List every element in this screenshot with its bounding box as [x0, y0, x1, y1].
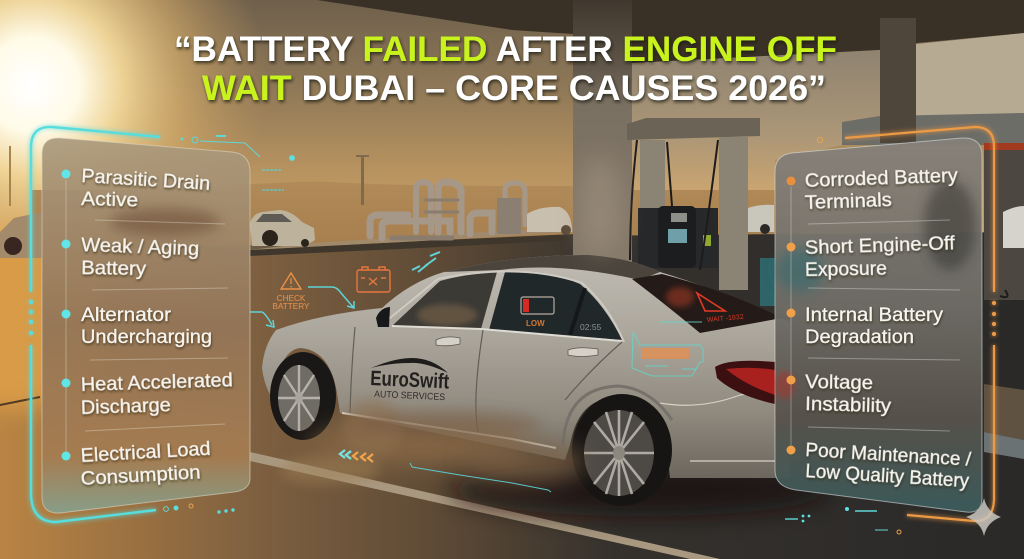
rear wheel arch: [563, 386, 672, 445]
window chrome upper: [385, 271, 624, 342]
white car right: [1003, 206, 1024, 248]
spokes rear: [584, 410, 654, 496]
tail light glow through card: [775, 371, 795, 399]
rear door handle: [568, 348, 598, 356]
roof dark: [444, 255, 660, 280]
icon: battery warning: [357, 267, 390, 292]
front door handle: [436, 337, 460, 346]
dividers left: [85, 220, 228, 431]
dark blur in left card: [110, 208, 220, 236]
item: poor maintenance low quality battery: Low Quality Battery: [805, 460, 970, 492]
canopy underside: [317, 0, 1024, 70]
left glass card: [42, 138, 250, 513]
pump canopy: [627, 118, 760, 140]
low battery icon in window: [521, 297, 554, 328]
sun glow: [0, 0, 330, 330]
car shadow: [450, 464, 830, 516]
item: voltage instability: Voltage: [805, 371, 873, 394]
item: heat accelerated discharge: Heat Accelerated: [80, 369, 233, 396]
arrow: to hood: [250, 312, 274, 327]
road marking line: [250, 452, 720, 559]
red reflection rear glass: [666, 287, 694, 307]
dark blur in right card: [924, 180, 976, 270]
icon: check battery warning: BATTERY: [272, 302, 310, 311]
item: internal battery degradation: Internal Battery: [805, 304, 943, 326]
rim front: [278, 365, 320, 431]
building right lower: [984, 150, 1024, 300]
item: short engine-off exposure: Exposure: [805, 258, 887, 281]
parked car distant centre: [250, 210, 315, 247]
item: weak aging battery: [62, 234, 200, 280]
item: parasitic drain: [62, 165, 211, 211]
check battery label: CHECK: [277, 294, 306, 303]
front door window: [392, 272, 497, 329]
item: internal battery degradation: [786, 304, 943, 348]
light pole: [356, 155, 369, 205]
window chrome: [392, 326, 622, 341]
kerb: [250, 234, 575, 256]
fuel pump: [638, 206, 718, 268]
item: parasitic drain: Active: [81, 188, 138, 211]
pump pillars: [640, 137, 748, 290]
hoses: [630, 140, 1008, 297]
item: weak aging battery: Weak / Aging: [81, 234, 200, 260]
tail light: [715, 361, 775, 404]
rear wall pale sky: [916, 33, 1024, 118]
item: electrical load consumption: Electrical Load: [80, 438, 211, 467]
title line 2: WAIT DUBAI – CORE CAUSES 2026”: [202, 69, 826, 108]
neon frame right: [845, 127, 995, 521]
car body: [262, 255, 790, 478]
road circuit line: [410, 463, 551, 492]
item: corroded battery terminals: Corroded Battery: [804, 165, 958, 192]
neon frame left: [30, 127, 160, 522]
tank equipment: [497, 198, 521, 234]
item: alternator undercharging: Undercharging: [81, 326, 212, 348]
dividers right: [808, 220, 960, 431]
side mirror: [376, 307, 390, 327]
tiled pavement: [984, 384, 1024, 440]
mid backdrop: [632, 50, 880, 190]
logo subtitle: AUTO SERVICES: [374, 389, 445, 403]
quarter pillar: [570, 288, 585, 335]
white car behind pillar: [527, 207, 572, 235]
panel: left causes: [30, 127, 294, 522]
ground crack: [0, 397, 40, 405]
time readout: 02:55: [580, 322, 602, 332]
road surface: [0, 232, 1024, 559]
timeline left: [65, 180, 67, 460]
sky: [0, 0, 1024, 240]
item: heat accelerated discharge: Discharge: [80, 394, 171, 419]
main pillar: [573, 0, 632, 262]
item: corroded battery terminals: [786, 165, 958, 214]
car: [262, 255, 830, 516]
pillar right: [880, 18, 916, 143]
item: weak aging battery: Battery: [81, 257, 147, 280]
warning triangle in rear glass: [697, 293, 725, 311]
HUD details left: [164, 136, 294, 513]
item: heat accelerated discharge: [62, 369, 233, 419]
building fascia right: [842, 113, 1024, 145]
item: alternator undercharging: Alternator: [81, 304, 172, 326]
logo wordmark: EuroSwift: [370, 367, 450, 393]
rear glass text: WAIT -1832: [707, 314, 744, 324]
right glass card: [775, 138, 982, 512]
item: alternator undercharging: [62, 304, 212, 348]
item: voltage instability: [786, 371, 892, 417]
tyre front: [270, 352, 336, 440]
item: poor maintenance low quality battery: Poor Maintenance /: [805, 439, 972, 471]
desert dunes: [30, 182, 800, 245]
red stripe building: [984, 143, 1024, 150]
holographic battery gauge: [632, 322, 703, 376]
far pole left: [9, 146, 11, 206]
kerb right: [984, 432, 1024, 459]
item: short engine-off exposure: Short Engine-Off: [804, 232, 956, 259]
timeline right: [790, 187, 792, 445]
item: electrical load consumption: Consumption: [80, 461, 201, 490]
arrow: to windscreen: [308, 287, 354, 308]
item: electrical load consumption: [62, 438, 211, 490]
door shut line: [350, 327, 622, 432]
logo: EuroSwift: [370, 358, 450, 403]
rear door window: [489, 271, 622, 340]
tyre rear: [572, 394, 672, 506]
panel: right causes: [775, 127, 995, 534]
white car by pump: [748, 205, 774, 234]
HUD details right: [785, 137, 901, 534]
rear wheel: [572, 394, 672, 506]
icon: sparkle star: [966, 498, 1001, 536]
tail light red: [726, 368, 775, 395]
dust cloud: [280, 155, 622, 484]
item: short engine-off exposure: [786, 232, 956, 281]
pavement: [250, 226, 575, 250]
low battery icon in window: LOW: [526, 319, 545, 328]
chevrons near battery: [412, 252, 440, 272]
teal tint in right card: [776, 248, 824, 292]
parked car left: [0, 212, 42, 258]
item: parasitic drain: Parasitic Drain: [81, 165, 211, 195]
item: poor maintenance low quality battery: [786, 439, 972, 492]
blue bin: [760, 258, 775, 306]
title: [174, 30, 837, 108]
rim rear: [584, 410, 654, 496]
sill chrome: [342, 413, 556, 448]
logo swoosh: [371, 358, 448, 373]
item: voltage instability: Instability: [805, 393, 892, 417]
front wheel: [270, 352, 336, 440]
left ground sun tint: [0, 230, 105, 410]
rear bumper line: [660, 390, 775, 461]
title line 1: “BATTERY FAILED AFTER ENGINE OFF: [174, 30, 837, 69]
spokes front: [278, 365, 320, 431]
refinery pipes: [370, 182, 525, 238]
warning triangle: [281, 273, 301, 289]
icon: check battery warning: [272, 273, 310, 311]
item: internal battery degradation: Degradation: [805, 326, 914, 348]
item: corroded battery terminals: Terminals: [804, 189, 892, 214]
rear windshield: [632, 274, 782, 333]
ground chevrons: [340, 450, 373, 462]
front window interior: [417, 304, 477, 326]
